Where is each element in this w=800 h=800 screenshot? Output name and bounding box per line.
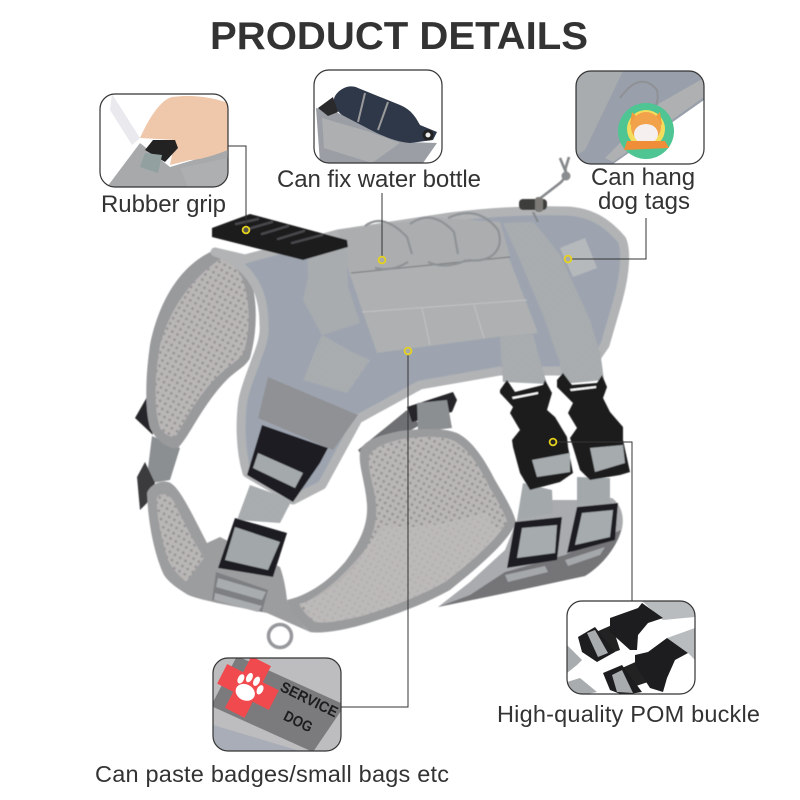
inset: rubber grip — [100, 94, 228, 187]
rear lower band — [438, 498, 623, 607]
label: buckle: High-quality POM buckle — [497, 701, 760, 727]
front strap — [500, 334, 547, 384]
left neck strap and side clips — [135, 397, 180, 510]
marker: water bottle — [379, 257, 385, 263]
molle panel — [338, 218, 538, 353]
inset: service dog badge: DOG — [281, 708, 315, 736]
elastic cord loops — [365, 213, 500, 269]
marker: rubber grip — [243, 227, 249, 233]
inset: water bottle — [314, 70, 442, 163]
webbing to lower buckles — [517, 483, 553, 520]
lower right buckles — [507, 503, 618, 568]
lower slider buckle — [218, 518, 287, 577]
inset: POM buckle — [567, 601, 695, 696]
handle strap — [303, 243, 360, 335]
leader line: dog tags — [572, 218, 646, 259]
chest connector strap — [358, 392, 457, 460]
red cross — [217, 658, 279, 718]
marker: dog tags — [565, 256, 571, 262]
inset: dog tag — [576, 71, 704, 164]
leader line: buckle — [557, 442, 632, 601]
side strap — [503, 222, 600, 358]
dog tag disc — [618, 103, 674, 159]
lower side strap — [558, 350, 604, 384]
left neck pad — [146, 250, 256, 448]
diagonal chest strap — [303, 335, 370, 393]
title: PRODUCT DETAILS — [210, 15, 588, 58]
label: dog tags — [591, 164, 695, 215]
vest body — [215, 211, 625, 500]
inset: service dog badge — [212, 657, 342, 752]
leader line: water bottle — [381, 193, 383, 256]
label: water bottle: Can fix water bottle — [277, 166, 481, 193]
center strap — [237, 485, 292, 523]
marker: buckle — [550, 439, 556, 445]
tag loop — [560, 238, 597, 277]
label: dog tags: Can hang — [591, 164, 695, 191]
right POM buckle — [557, 373, 630, 480]
left POM buckle — [500, 380, 573, 490]
label: badges: Can paste badges/small bags etc — [95, 761, 449, 787]
lower left pad — [147, 482, 310, 632]
leader line: rubber grip — [228, 146, 246, 226]
label: rubber grip: Rubber grip — [101, 191, 226, 218]
chest mesh pad — [287, 429, 516, 633]
harness illustration — [135, 157, 630, 648]
marker: badges — [405, 348, 411, 354]
badge text: SERVICE — [277, 679, 341, 721]
cord lock — [519, 157, 570, 222]
upper slider buckle — [247, 425, 328, 502]
grey patch — [258, 377, 358, 450]
D-ring — [268, 624, 292, 648]
leader line: badges — [341, 355, 408, 707]
rubber handle — [212, 214, 348, 260]
label: dog tags: dog tags — [598, 188, 690, 215]
